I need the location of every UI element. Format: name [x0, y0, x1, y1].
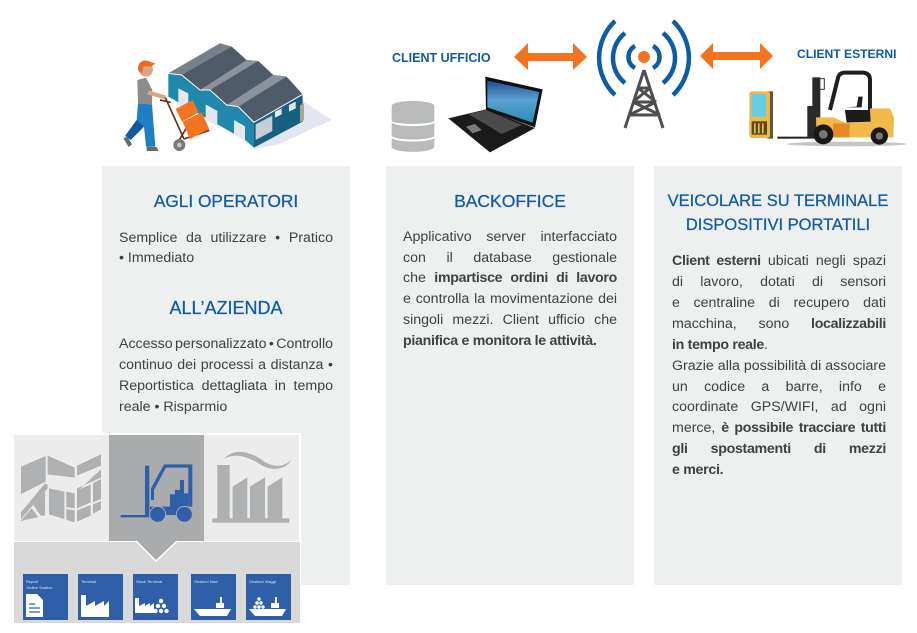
text: vehicle terminal description: macchina, sono localizzabili [672, 316, 886, 332]
tile: report ordine scarico [23, 574, 68, 620]
icon: laptop [448, 77, 543, 152]
text: backoffice description: che impartisce ordini di lavoro [403, 270, 617, 286]
text: backoffice description: con il database gestionale [403, 250, 617, 266]
tile: gestioni viaggi [246, 574, 291, 620]
text: vehicle terminal description: merce, è possibile tracciare tutti [672, 420, 886, 436]
icon: database [392, 101, 434, 152]
text: vehicle terminal description: Client esterni ubicati negli spazi [672, 253, 886, 269]
text: backoffice description: e controlla la movimentazione dei [403, 291, 617, 307]
icon: forklift [777, 73, 907, 146]
text: backoffice description: Applicativo server interfacciato [403, 229, 617, 245]
pointer triangle [136, 540, 177, 561]
text: vehicle terminal description: e centraline di recupero dati [672, 295, 886, 311]
text: vehicle terminal description: in tempo reale. [672, 337, 768, 353]
heading: all'azienda: ALL’AZIENDA [169, 298, 283, 318]
text: vehicle terminal description: gli spostamenti di mezzi [672, 441, 886, 457]
icon: gray factory chart [212, 452, 292, 523]
tile: stock terminal: Stock Terminal [136, 579, 162, 584]
text: vehicle terminal description: di lavoro, dotati di sensori [672, 274, 886, 290]
text: company benefits: Accesso personalizzato • Controllo [119, 336, 333, 352]
text: vehicle terminal description: e merci. [672, 462, 723, 478]
panel: backoffice [386, 166, 634, 585]
panel: veicolare su terminale [654, 166, 902, 585]
icon: blue forklift [121, 464, 192, 522]
heading: agli operatori: AGLI OPERATORI [154, 191, 298, 211]
label: client ufficio: CLIENT UFFICIO [392, 51, 491, 65]
panel: agli operatori [102, 166, 350, 585]
text: vehicle terminal description: coordinate GPS/WIFI, ad ogni [672, 399, 886, 415]
heading: backoffice: BACKOFFICE [454, 191, 566, 211]
text: vehicle terminal description: un codice a barre, info e [672, 379, 886, 395]
text: operator benefits: • Immediato [119, 250, 194, 266]
tile: terminal [78, 574, 123, 620]
tile: gestioni navi: Gestioni Navi [194, 579, 218, 584]
icon: worker with hand truck [123, 61, 209, 151]
icon: warehouse [168, 43, 332, 149]
text: company benefits: reale • Risparmio [119, 399, 227, 415]
text: operator benefits [119, 230, 333, 266]
text: company benefits: continuo dei processi a distanza • [119, 357, 333, 373]
label: client esterni: CLIENT ESTERNI [797, 47, 896, 61]
arrow: antenna to client esterni [700, 43, 773, 69]
icon: handheld terminal [749, 91, 773, 139]
text: backoffice description [403, 229, 617, 349]
text: backoffice description: pianifica e monitora le attività. [403, 333, 597, 349]
text: backoffice description: singoli mezzi. Client ufficio che [403, 312, 617, 328]
text: company benefits: Reportistica dettagliata in tempo [119, 378, 333, 394]
text: company benefits [119, 336, 333, 415]
tile: report ordine scarico: Report [26, 579, 39, 584]
text: operator benefits: Semplice da utilizzare • Pratico [119, 230, 333, 246]
tile: report ordine scarico: Ordine Scarico [26, 585, 53, 590]
text: vehicle terminal description: Grazie alla possibilità di associare [672, 358, 886, 374]
icon: radio antenna [599, 21, 689, 128]
icon: gray map [21, 454, 101, 522]
tile: stock terminal [133, 574, 178, 620]
heading: veicolare su terminale: VEICOLARE SU TERMINALE [668, 192, 888, 210]
heading: veicolare su terminale: DISPOSITIVI PORTATILI [686, 216, 870, 234]
arrow: client ufficio to antenna [514, 43, 587, 70]
tile: terminal: Terminal [81, 579, 96, 584]
tile: gestioni viaggi: Gestioni Viaggi [249, 579, 276, 584]
heading: veicolare su terminale [668, 192, 888, 234]
text: vehicle terminal description [672, 253, 886, 478]
tile: gestioni navi [191, 574, 236, 620]
